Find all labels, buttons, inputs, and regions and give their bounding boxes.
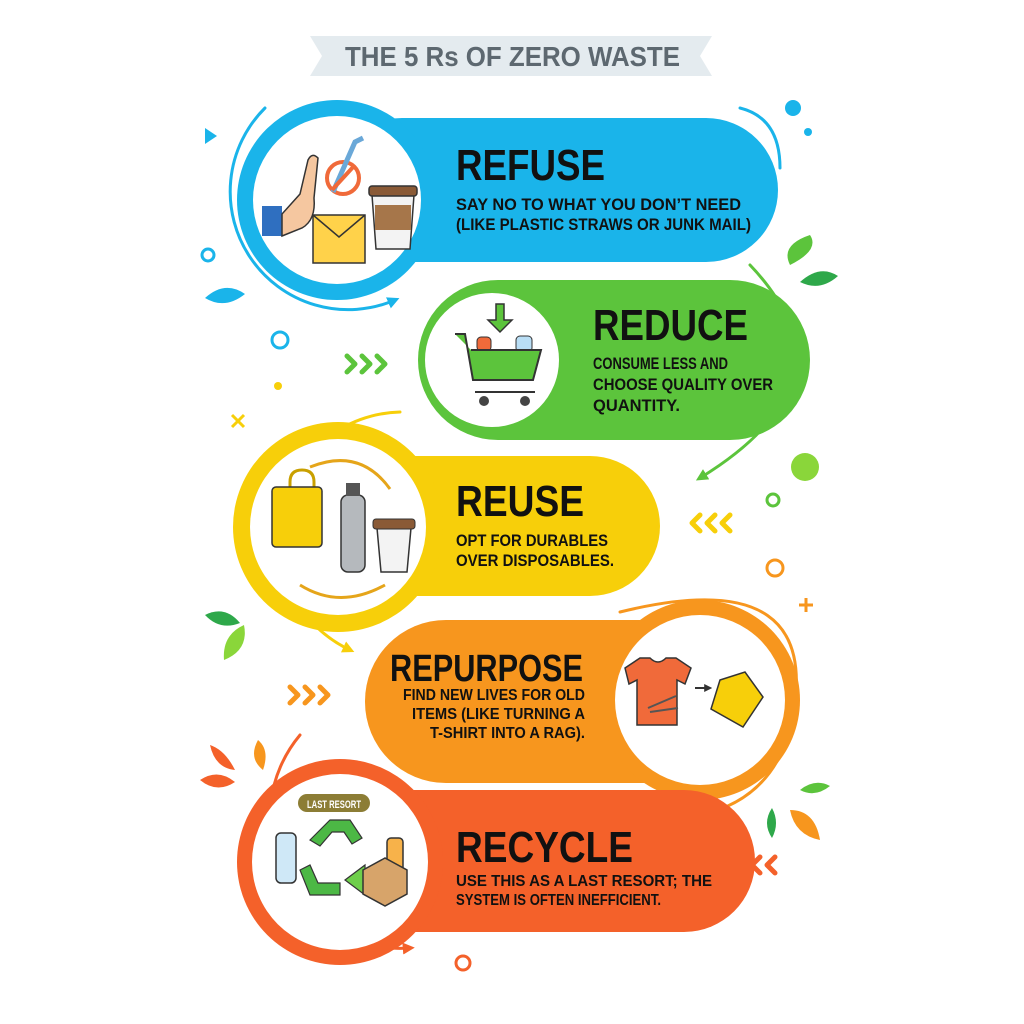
heading: reuse: REUSE	[456, 477, 584, 526]
text: reduce: QUANTITY.	[593, 396, 680, 415]
icon: t-shirt to rag	[625, 658, 763, 727]
icon: refuse	[262, 138, 417, 263]
chevrons	[290, 356, 775, 873]
text: repurpose	[403, 687, 585, 742]
text: recycle	[456, 873, 712, 909]
panel: reduce	[418, 280, 810, 440]
heading: repurpose: REPURPOSE	[390, 648, 583, 690]
text: refuse	[456, 195, 751, 234]
title: THE 5 Rs OF ZERO WASTE	[345, 41, 680, 72]
icon: reuse	[272, 461, 415, 598]
icon: cart	[455, 304, 541, 406]
badge: last resort: LAST RESORT	[307, 799, 361, 811]
text: reduce	[593, 354, 773, 415]
text: recycle: SYSTEM IS OFTEN INEFFICIENT.	[456, 892, 661, 909]
text: repurpose: T-SHIRT INTO A RAG).	[430, 725, 585, 742]
icon: recycle	[276, 820, 407, 906]
heading: recycle: RECYCLE	[456, 823, 633, 872]
heading: refuse: REFUSE	[456, 141, 605, 190]
text: recycle: USE THIS AS A LAST RESORT; THE	[456, 873, 712, 890]
text: refuse: SAY NO TO WHAT YOU DON’T NEED	[456, 195, 741, 214]
text: refuse: (LIKE PLASTIC STRAWS OR JUNK MAIL)	[456, 215, 751, 234]
decorative shapes	[200, 100, 838, 970]
panel: repurpose	[365, 600, 800, 800]
text: repurpose: ITEMS (LIKE TURNING A	[412, 706, 585, 723]
title	[310, 36, 712, 76]
panel: recycle	[237, 759, 755, 965]
text: reduce: CHOOSE QUALITY OVER	[593, 375, 773, 394]
text: reuse	[456, 531, 614, 570]
text: repurpose: FIND NEW LIVES FOR OLD	[403, 687, 585, 704]
panel: refuse	[237, 100, 778, 300]
text: reuse: OPT FOR DURABLES	[456, 531, 608, 550]
text: reuse: OVER DISPOSABLES.	[456, 551, 614, 570]
heading: reduce: REDUCE	[593, 301, 748, 350]
panel: reuse	[233, 422, 660, 632]
text: reduce: CONSUME LESS AND	[593, 354, 728, 373]
badge: last resort	[298, 794, 370, 812]
connecting arcs	[230, 108, 796, 948]
